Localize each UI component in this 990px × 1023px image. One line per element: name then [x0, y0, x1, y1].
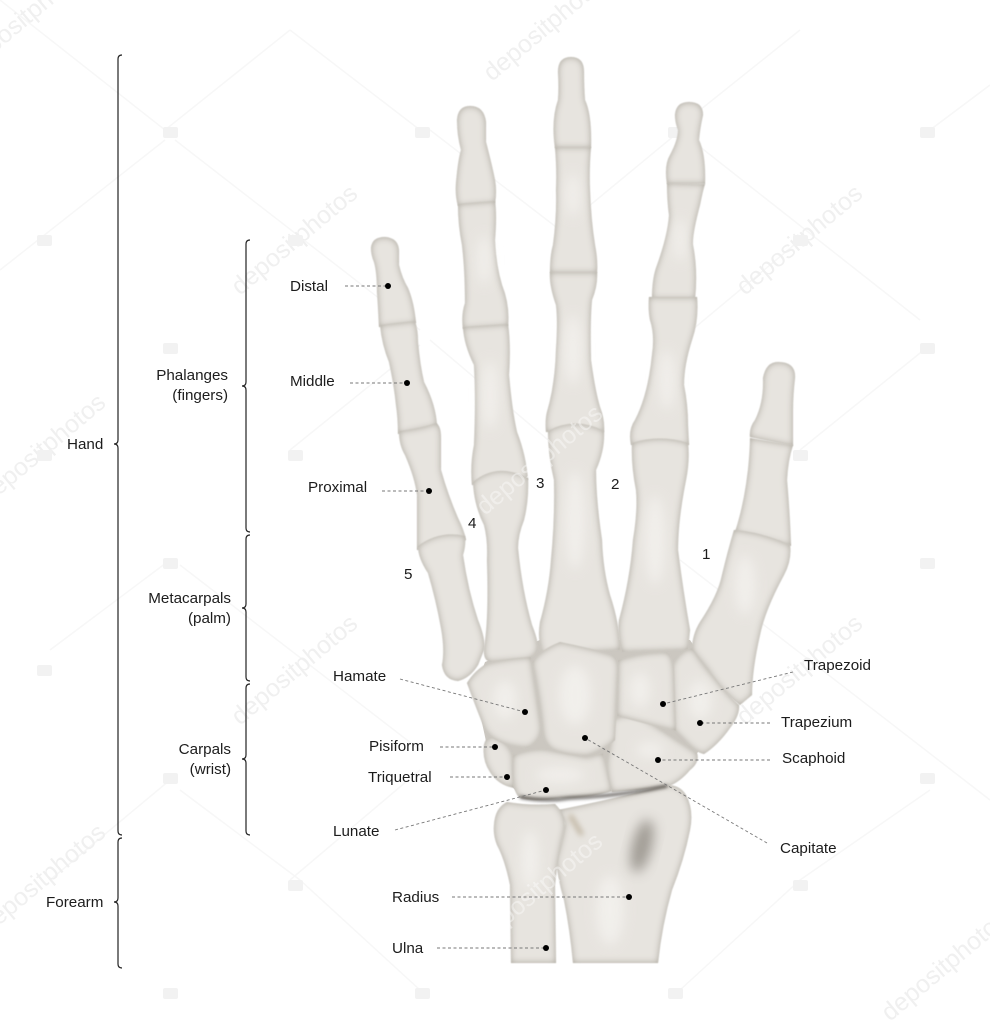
callout: Middle: Middle: [290, 373, 335, 390]
little finger phalanges: [371, 237, 466, 550]
watermark: depositphotos: [226, 179, 363, 301]
watermark over bones: depositphotos: [471, 399, 608, 521]
callout: Trapezoid: Trapezoid: [804, 657, 871, 674]
callout: Hamate: [333, 668, 528, 715]
trapezoid: [617, 652, 676, 731]
watermark: depositphotos: [731, 179, 868, 301]
callout: Proximal: [308, 479, 432, 496]
callout: Pisiform: [369, 738, 498, 755]
callout: Proximal: Proximal: [308, 479, 367, 496]
scaphoid: [607, 715, 698, 792]
bracket: phalanges: [242, 240, 250, 532]
callout: Hamate: Hamate: [333, 668, 386, 685]
ring finger phalanges: [456, 106, 528, 485]
metacarpals: [418, 424, 790, 705]
callout: Ulna: Ulna: [392, 940, 424, 957]
bracket: hand: [114, 55, 122, 835]
callout: Lunate: [333, 787, 549, 840]
finger number 4: 4: [468, 515, 476, 532]
callout: Middle: [290, 373, 410, 390]
thumb phalanges: [735, 362, 795, 546]
label: Hand: Hand: [67, 436, 103, 453]
label: Phalanges (fingers): (fingers): [172, 387, 228, 404]
wrist shadow: [520, 786, 667, 800]
trapezium: [672, 648, 739, 754]
ulna: [494, 802, 565, 963]
bracket: metacarpals: [242, 535, 250, 681]
watermark over bones: depositphotos: [471, 827, 608, 949]
callout: Trapezoid: [660, 657, 871, 707]
callout: Distal: Distal: [290, 278, 328, 295]
label: Metacarpals (palm): (palm): [188, 610, 231, 627]
callout: Scaphoid: Scaphoid: [782, 750, 845, 767]
watermark: depositphotos: [226, 609, 363, 731]
capitate: [532, 642, 618, 756]
radius: [556, 785, 691, 963]
bracket: carpals: [242, 684, 250, 835]
bracket: forearm: [114, 838, 122, 968]
callout: Capitate: [582, 735, 837, 857]
finger number 1: 1: [702, 546, 710, 563]
finger number 3: 3: [536, 475, 544, 492]
pisiform and triquetral: [484, 737, 514, 788]
bone highlights: [477, 173, 755, 945]
callout: Capitate: Capitate: [780, 840, 837, 857]
callout: Distal: [290, 278, 391, 295]
label: Phalanges (fingers): Phalanges: [156, 367, 228, 384]
carpals: [467, 642, 739, 800]
middle finger phalanges: [546, 57, 604, 432]
callout: Triquetral: [368, 769, 510, 786]
callout: Scaphoid: [655, 750, 845, 767]
watermark over bones: [471, 399, 608, 949]
finger number 5: 5: [404, 566, 412, 583]
label: Carpals (wrist): (wrist): [190, 761, 231, 778]
index finger phalanges: [630, 102, 705, 445]
lunate: [512, 749, 612, 800]
joint backing behind wrist: [475, 640, 735, 796]
radius hollow: [570, 815, 658, 875]
callout: Lunate: Lunate: [333, 823, 379, 840]
callout: Triquetral: Triquetral: [368, 769, 432, 786]
callout: Radius: [392, 889, 632, 906]
label: Metacarpals (palm): Metacarpals: [148, 590, 231, 607]
label: Carpals (wrist): Carpals: [179, 741, 231, 758]
callout: Ulna: [392, 940, 549, 957]
hamate: [467, 657, 541, 748]
finger number 2: 2: [611, 476, 619, 493]
callout: Trapezium: Trapezium: [781, 714, 852, 731]
callout: Radius: Radius: [392, 889, 440, 906]
callout: Trapezium: [697, 714, 852, 731]
label: Forearm: Forearm: [46, 894, 103, 911]
callout: Pisiform: Pisiform: [369, 738, 424, 755]
watermark: depositphotos: [731, 609, 868, 731]
hand skeleton illustration: [371, 57, 795, 963]
